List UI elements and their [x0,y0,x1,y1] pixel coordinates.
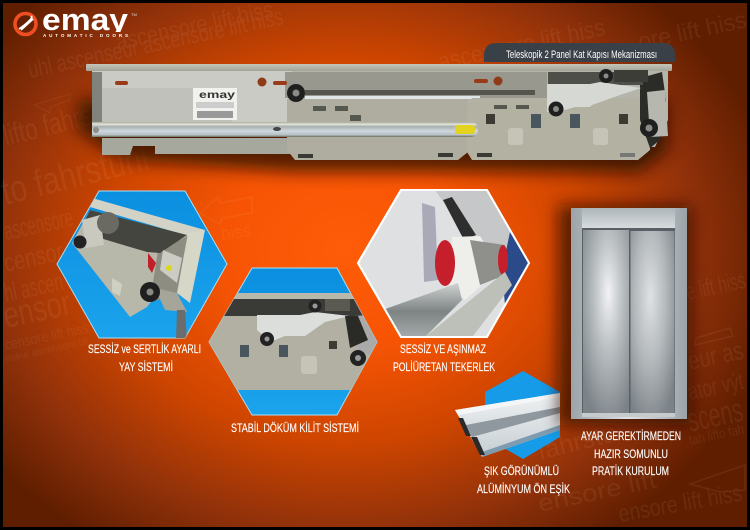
caption: door: AYAR GEREKTİRMEDEN [581,429,681,443]
sill [582,413,675,417]
watermark text: hiss [220,220,252,244]
lock photo [234,293,354,299]
watermark text: censore lift hiss [3,320,90,354]
logo: emay [13,12,136,37]
rollers [287,84,305,102]
mechanism body [72,210,188,317]
hexagon: cast lock [205,268,380,415]
door shadow [558,205,692,425]
front rail [92,122,478,137]
caption: door [581,429,681,478]
wordmark: emay [42,2,129,37]
caption: door: PRATİK KURULUM [592,464,669,478]
right panel [630,231,674,414]
watermark text: lifto fahrs [0,99,95,153]
caption: aluminium threshold [477,464,570,496]
blue hexagon [485,371,560,459]
lock bracket [547,82,641,112]
watermark text: ore lift hiss [636,7,749,56]
caption: polyurethane wheel: POLİÜRETAN TEKERLEK [393,360,495,374]
watermark text: ascensore [1,202,76,246]
caption: spring system: YAY SİSTEMİ [119,360,173,374]
watermark text: ensor [0,282,74,336]
aluminium profile [455,393,560,457]
slots and holes [115,81,128,85]
back plate [92,70,668,147]
top lip [86,64,672,71]
watermark text: hl ascen [1,266,66,308]
hexagon: spring system [57,191,227,340]
watermark text: fahrstu [534,417,619,466]
tagline: AUTOMATIC DOORS [43,33,128,38]
lower left flange [102,138,290,155]
watermark text: to fahrstuhl [0,137,153,214]
caption: spring system: SESSİZ ve SERTLİK AYARLI [88,342,201,356]
title tab [484,43,675,62]
caption: polyurethane wheel: SESSİZ VE AŞINMAZ [400,342,486,356]
watermark text: ensore lift [536,466,659,518]
door frame [571,208,687,419]
watermark text: ascensore lift hiss [436,14,608,76]
right plate [467,98,650,160]
caption: spring system [88,342,201,374]
caption: cast lock: STABİL DÖKÜM KİLİT SİSTEMİ [231,421,359,435]
product label: emay [199,90,236,101]
caption: polyurethane wheel [393,342,495,374]
wheel photo [436,191,510,279]
lower left plate [287,99,468,160]
icon: logo ring [15,14,36,34]
trademark: TM [131,12,137,17]
watermark text: nseur ascensore lift [4,336,90,365]
watermark text: censor [1,236,66,278]
caption: aluminium threshold: ŞIK GÖRÜNÜMLÜ [484,464,559,478]
aluminium threshold with hexagon [455,371,560,459]
door mechanism photo [78,64,672,172]
mechanism shadow [78,100,668,172]
caption: door: HAZIR SOMUNLU [594,447,668,461]
product label [193,88,237,120]
elevator door [558,205,692,425]
title tab: Teleskopik 2 Panel Kat Kapısı Mekanizması [506,49,657,61]
left panel [583,230,629,415]
hexagon: polyurethane wheel [358,190,530,340]
caption: aluminium threshold: ALÜMİNYUM ÖN EŞİK [477,482,570,496]
right-hand dark housing [640,72,666,148]
